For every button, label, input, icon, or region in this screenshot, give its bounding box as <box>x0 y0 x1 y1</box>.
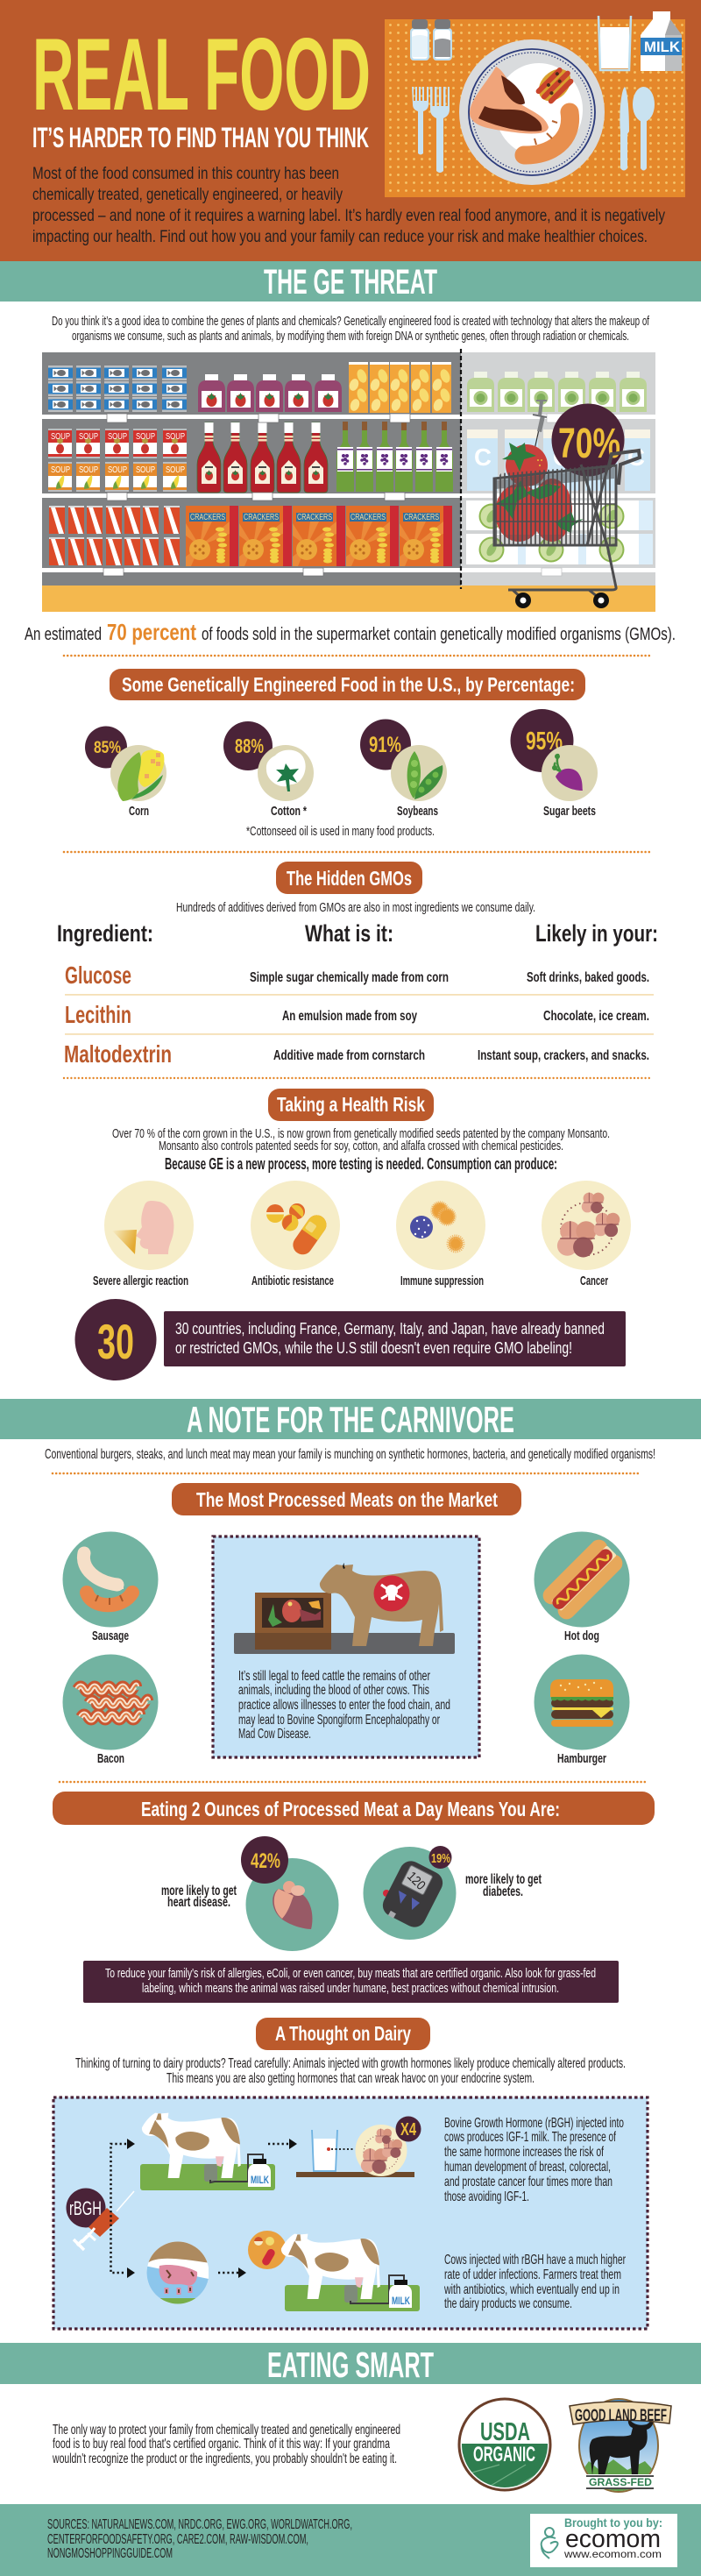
text: IGF-1 milk: the same hormone increases the risk of <box>444 2145 604 2160</box>
icon: glass of milk with IGF-1 <box>296 2130 414 2177</box>
footer panel <box>0 2504 701 2576</box>
arrow: cow to milk <box>268 2139 297 2149</box>
label: diabetes. <box>483 1884 523 1899</box>
statistic: 70 percent of foods <box>25 619 676 645</box>
illustration: supermarket shelves <box>42 349 655 612</box>
column headers: What is it: <box>305 920 393 947</box>
organic cartons: C <box>627 444 645 471</box>
stat: heart disease 42% <box>161 1836 338 1951</box>
icon: sausages <box>83 1549 132 1605</box>
cracker boxes: CRACKERS <box>350 513 386 522</box>
heading pill: The Hidden GMOs: The Hidden GMOs <box>287 867 412 890</box>
section band: Eating Smart: EATING SMART <box>267 2345 434 2385</box>
stat: corn 85% <box>85 726 166 819</box>
dashed divider <box>460 349 462 589</box>
illustration: place setting <box>385 11 685 197</box>
heading pill: A Thought on Dairy: A Thought on Dairy <box>275 2022 411 2045</box>
text: dairy intro <box>75 2056 626 2086</box>
meat: hamburger <box>535 1655 629 1766</box>
icon: head <box>136 1201 173 1254</box>
icon: sugar beet <box>552 754 583 791</box>
label: Hot dog <box>564 1629 599 1643</box>
label <box>161 1884 237 1910</box>
icon: treated cow and milking: MILK <box>392 2295 410 2307</box>
label: Hamburger <box>557 1751 606 1766</box>
icon: knife <box>620 87 629 170</box>
heading pill: A Thought on Dairy <box>256 2018 430 2050</box>
logo: USDA Organic: USDA <box>480 2418 530 2446</box>
icon: dinner plate with steak, sausage and vegetables <box>459 39 605 185</box>
text: may lead to Bovine Spongiform Encephalopathy or <box>238 1713 440 1728</box>
icon: cancer cells x4 <box>356 2116 421 2176</box>
footnote: *Cottonseed oil is used in many food products. <box>246 824 435 839</box>
icon: antibiotics <box>248 2231 287 2269</box>
label: more likely to get <box>465 1872 542 1887</box>
icon: glass of milk <box>598 16 631 70</box>
icon: mother and child <box>542 2528 557 2558</box>
label: Cancer <box>580 1274 608 1288</box>
icon: dairy cow and milking: MILK <box>251 2174 269 2186</box>
cracker boxes: CRACKERS <box>190 513 225 522</box>
column headers <box>57 920 658 947</box>
text box <box>164 1311 626 1366</box>
label: more likely to get <box>161 1884 237 1898</box>
badge: 30 <box>75 1299 156 1380</box>
label: Sausage <box>92 1629 129 1643</box>
row: glucose: Soft drinks, baked goods. <box>527 970 649 985</box>
text: animals, including the blood of other cows. This <box>238 1683 429 1698</box>
icon: rBGH badge: rBGH <box>69 2197 102 2219</box>
text: udder infections: with antibiotics, which eventually end up in <box>443 2282 620 2297</box>
text: GE introduction <box>52 314 650 344</box>
label: Soybeans <box>397 804 438 819</box>
intro paragraph: Most of the food consumed in this country has been <box>32 164 339 183</box>
text: sources <box>47 2517 352 2561</box>
ground <box>234 1633 455 1654</box>
organic cartons <box>467 429 650 491</box>
icon: hamburger <box>550 1679 613 1727</box>
icon: cow with skull badge <box>320 1563 443 1646</box>
logo: ecomom <box>530 2514 677 2567</box>
icon: treated cow and milking <box>281 2234 420 2311</box>
soup cans: SOUP <box>51 431 70 442</box>
orange boxes <box>348 362 451 413</box>
column headers: Ingredient: <box>57 920 153 947</box>
stat: cotton 88% <box>223 721 314 819</box>
section band: The GE Threat: THE GE THREAT <box>264 263 437 302</box>
soup cans: SOUP <box>108 465 127 475</box>
stat: cotton 88%: 88% <box>235 734 264 757</box>
banner: Grass-fed: GRASS-FED <box>589 2478 652 2488</box>
heading pill: processed meats <box>172 1483 521 1515</box>
icon: shopping cart full of tomatoes <box>494 451 640 608</box>
icon: glucose meter <box>379 1857 447 1931</box>
badge: 42% <box>241 1836 288 1884</box>
organic bottles <box>467 372 647 412</box>
soup cans: SOUP <box>136 465 155 475</box>
text: eating smart advice <box>52 2423 400 2466</box>
label: Severe allergic reaction <box>93 1274 188 1288</box>
soup cans <box>48 429 187 492</box>
label <box>465 1872 542 1899</box>
row: maltodextrin: Maltodextrin <box>64 1040 172 1068</box>
text: eating smart advice: wouldn't recognize the product or the ingredients, you probably shouldn't be eating it. <box>52 2452 397 2466</box>
row: lecithin: An emulsion made from soy <box>282 1009 417 1024</box>
logo: ecomom: ecomom <box>565 2525 661 2553</box>
text: eating smart advice: food is to buy real food that's certified organic. Think of it this way: If your grandma <box>53 2437 390 2452</box>
heading pill: GE food by percentage <box>110 669 585 700</box>
ketchup bottles <box>197 422 328 493</box>
row: maltodextrin: Additive made from cornstarch <box>273 1048 425 1063</box>
icon: black bull <box>590 2416 654 2475</box>
meat: bacon <box>63 1655 158 1766</box>
stat: diabetes 19% <box>363 1846 542 1940</box>
icon: corn <box>117 750 164 801</box>
icon: infected udder <box>147 2242 209 2303</box>
icon: white blood cell <box>410 1216 433 1238</box>
icon: GE tomato <box>502 443 548 486</box>
row: glucose <box>65 962 649 989</box>
cracker boxes: CRACKERS <box>404 513 439 522</box>
shelf price tags <box>103 414 567 576</box>
text: IGF-1 milk: human development of breast, colorectal, <box>444 2160 611 2175</box>
icon: syringe in tomato <box>533 401 547 458</box>
section band: The GE Threat <box>0 261 701 302</box>
heading pill: Taking a Health Risk: Taking a Health Risk <box>277 1093 425 1116</box>
text: IGF-1 milk <box>444 2116 624 2204</box>
text: eating smart advice: The only way to protect your family from chemically treated and genetically engineered <box>53 2423 400 2438</box>
logo: Good Land Beef <box>570 2398 671 2493</box>
logo: ecomom: Brought to you by: <box>564 2516 662 2530</box>
callout: 70% badge: 70% <box>558 421 620 467</box>
icon: pills <box>266 1203 330 1259</box>
stat: soybeans 91%: 91% <box>369 733 401 757</box>
stat: sugar beets 95% <box>510 709 598 819</box>
icon: bacon strips <box>77 1685 148 1720</box>
meat: sausage <box>63 1532 158 1643</box>
text: udder infections <box>443 2253 626 2311</box>
soup cans: SOUP <box>166 431 185 442</box>
icon: dairy cow and milking <box>140 2113 275 2190</box>
icon: cotton <box>266 750 306 791</box>
soup cans: SOUP <box>51 465 70 475</box>
text: sources: CENTERFORFOODSAFETY.ORG, CARE2.COM, RAW-WISDOM.COM, <box>47 2532 308 2547</box>
cracker boxes: CRACKERS <box>244 513 279 522</box>
section band: Eating Smart <box>0 2343 701 2385</box>
stat: corn 85%: 85% <box>94 739 121 757</box>
striped packages <box>49 506 180 565</box>
icon: forks <box>412 87 450 173</box>
label: Antibiotic resistance <box>251 1274 334 1288</box>
tomato sauce jars <box>198 374 342 412</box>
arrow: rBGH to both paths <box>110 2139 135 2278</box>
soup cans: SOUP <box>166 465 185 475</box>
icon: hot dog <box>540 1536 626 1622</box>
heading pill: Taking a Health Risk <box>268 1089 434 1121</box>
logo: USDA Organic <box>459 2399 550 2494</box>
statistic: 70 percent of foods: 70 percent <box>107 619 196 645</box>
icon: rBGH badge <box>67 2188 105 2228</box>
header panel <box>0 0 701 261</box>
row: lecithin: Lecithin <box>65 1001 131 1028</box>
text: It’s still legal to feed cattle the remains of other <box>238 1669 430 1684</box>
icon: breath cone <box>112 1230 137 1254</box>
soup cans: SOUP <box>79 431 98 442</box>
icon: cancer cells x4: X4 <box>400 2120 417 2140</box>
row: lecithin: Chocolate, ice cream. <box>543 1009 649 1024</box>
cucumber products <box>465 500 654 565</box>
row: lecithin <box>65 1001 649 1028</box>
heading pill: processed meats: The Most Processed Meats on the Market <box>196 1488 498 1511</box>
meat: hot dog <box>535 1532 629 1643</box>
label: heart disease. <box>167 1895 230 1910</box>
label: Sugar beets <box>543 804 596 819</box>
stat: soybeans 91% <box>360 719 447 819</box>
risk: antibiotic resistance <box>251 1181 340 1288</box>
soup cans: SOUP <box>108 431 127 442</box>
text: practice allows illnesses to enter the food chain, and <box>238 1698 450 1713</box>
organic cartons: C <box>553 444 570 471</box>
text: IGF-1 milk: those avoiding IGF-1. <box>444 2189 529 2204</box>
row: glucose: Simple sugar chemically made from corn <box>250 970 449 985</box>
icon: heart <box>273 1881 312 1929</box>
heading pill: The Hidden GMOs <box>276 862 422 894</box>
statistic: 70 percent of foods: An estimated <box>25 625 102 644</box>
heading pill: 2 ounces of processed meat <box>53 1792 655 1825</box>
cracker boxes: CRACKERS <box>297 513 332 522</box>
text: udder infections: the dairy products we consume. <box>444 2296 572 2311</box>
logo: USDA Organic: ORGANIC <box>473 2443 535 2466</box>
label: Bacon <box>97 1751 124 1766</box>
soup cans: SOUP <box>79 465 98 475</box>
risk: immune suppression <box>396 1181 485 1288</box>
text: Mad Cow Disease. <box>238 1727 311 1742</box>
logo: ecomom: www.ecomom.com <box>563 2550 662 2560</box>
canned fish <box>48 365 187 412</box>
icon: orange viruses <box>432 1203 463 1251</box>
icon: soybeans <box>407 751 443 799</box>
title: Real Food: REAL FOOD <box>32 17 371 131</box>
table: hidden GMO ingredients <box>57 920 658 1068</box>
cracker boxes <box>186 506 452 566</box>
callout: certified organic meat <box>83 1961 619 2003</box>
text: IGF-1 milk: and prostate cancer four times more than <box>444 2175 612 2189</box>
panel: cattle feed <box>213 1536 479 1757</box>
text: Monsanto paragraph <box>112 1126 610 1153</box>
column headers: Likely in your: <box>535 920 658 947</box>
panel: rBGH dairy flow <box>53 2097 648 2329</box>
risk: cancer <box>542 1181 631 1288</box>
icon: milk carton: MILK <box>644 39 681 55</box>
subtitle: IT’S HARDER TO FIND THAN YOU THINK <box>32 122 369 153</box>
arrow: udder to antibiotics <box>218 2267 246 2278</box>
text: hidden GMOs intro: Hundreds of additives derived from GMOs are also in most ingredients we consume daily. <box>176 900 535 915</box>
row: maltodextrin <box>64 1040 649 1068</box>
stat: sugar beets 95%: 95% <box>526 727 563 756</box>
badge: 30: 30 <box>97 1314 134 1369</box>
heading pill: 2 ounces of processed meat: Eating 2 Ounces of Processed Meat a Day Means You Are: <box>141 1798 560 1820</box>
intro paragraph <box>32 164 665 246</box>
organic cartons: C <box>474 444 492 471</box>
icon: cancer cells <box>557 1193 620 1257</box>
icon: syringe <box>74 2191 134 2250</box>
risk: severe allergic reaction <box>93 1181 194 1288</box>
badge: 42%: 42% <box>251 1849 280 1873</box>
text box: or restricted GMOs, while the U.S still doesn't even require GMO labeling! <box>175 1338 572 1357</box>
row: glucose: Glucose <box>65 962 131 989</box>
icon: feed box <box>255 1593 331 1650</box>
text <box>238 1669 450 1742</box>
wine bottles <box>336 422 453 492</box>
badge: 19%: 19% <box>431 1851 450 1866</box>
icon: milk carton <box>641 11 682 71</box>
icon: salt and pepper shakers <box>410 19 452 60</box>
icon: spoon <box>633 87 655 170</box>
text: sources: SOURCES: NATURALNEWS.COM, NRDC.ORG, EWG.ORG, WORLDWATCH.ORG, <box>47 2517 352 2532</box>
soup cans: SOUP <box>136 431 155 442</box>
callout: 30 countries <box>75 1299 626 1380</box>
text: sources: NONGMOSHOPPINGGUIDE.COM <box>47 2546 173 2561</box>
intro paragraph: chemically treated, genetically engineered, or heavily <box>32 185 343 204</box>
label: Cotton * <box>271 804 307 819</box>
callout: 70% badge <box>552 403 624 477</box>
badge: 19% <box>429 1846 452 1869</box>
icon: glucose meter: 120 <box>404 1869 428 1893</box>
label: Immune suppression <box>400 1274 484 1288</box>
label: Corn <box>129 804 149 819</box>
